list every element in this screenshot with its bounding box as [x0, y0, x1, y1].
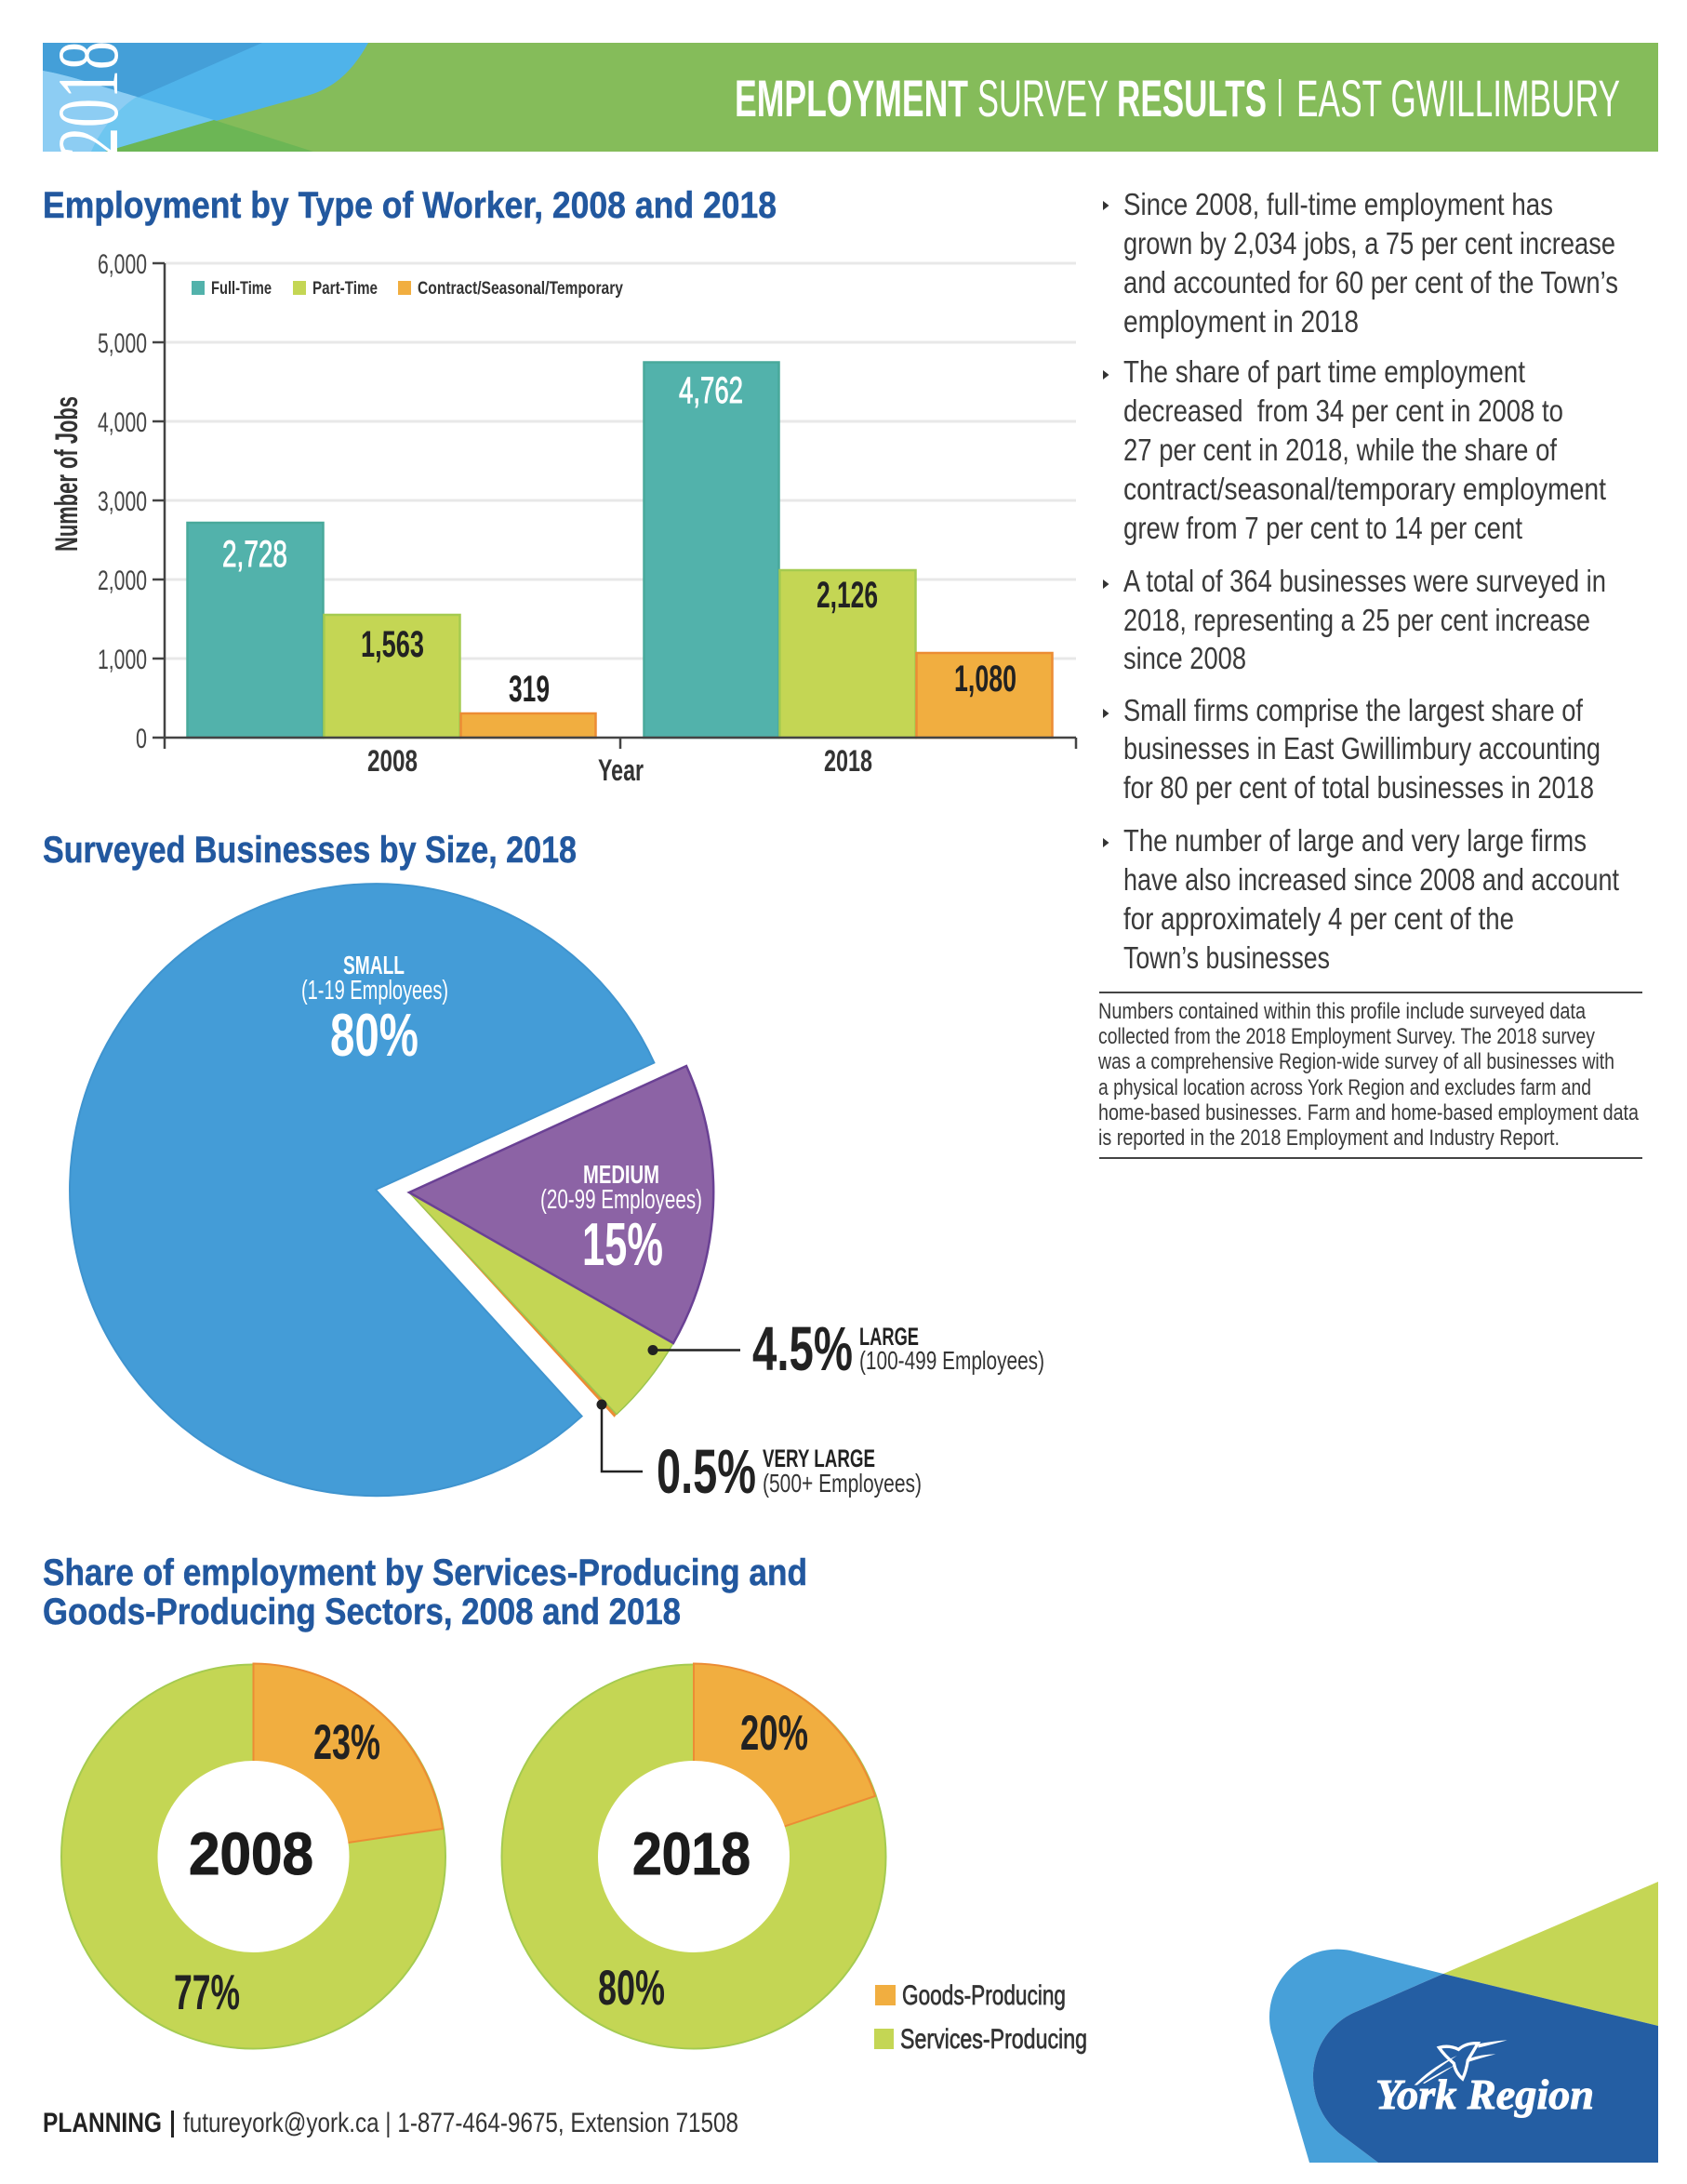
x axis labels: 2018 — [824, 744, 872, 778]
bullet: part-time share: grew from 7 per cent to 14 per cent — [1123, 511, 1522, 545]
label: small: SMALL — [343, 951, 405, 979]
header title: SURVEY — [977, 69, 1109, 127]
x axis labels — [367, 744, 872, 787]
callout: very large: (500+ Employees) — [763, 1469, 922, 1498]
callout: large: LARGE — [859, 1323, 919, 1351]
slice: medium 15% — [409, 1066, 713, 1343]
bar value labels: 319 — [509, 669, 550, 710]
bullet: part-time share: 27 per cent in 2018, while the share of — [1123, 433, 1558, 467]
donut hole — [158, 1761, 350, 1952]
heading: share of employment: Share of employment by Services-Producing and — [43, 1552, 807, 1593]
legend — [192, 279, 623, 299]
slice: small 80% — [70, 884, 654, 1496]
value labels — [174, 1715, 380, 2020]
donut legend: Goods-Producing — [902, 1980, 1066, 2011]
y axis tick labels: 1,000 — [98, 645, 147, 675]
label: medium: MEDIUM — [583, 1160, 659, 1189]
y axis tick labels: 2,000 — [98, 566, 147, 596]
footer contact — [43, 2108, 738, 2138]
label: medium: 15% — [582, 1210, 663, 1278]
bar value labels — [222, 370, 1016, 710]
segment: goods-producing 20% — [694, 1663, 875, 1857]
value labels: 77% — [174, 1965, 240, 2020]
callout: very large — [597, 1399, 922, 1507]
header banner — [41, 41, 1658, 156]
bar value labels: 4,762 — [679, 370, 743, 411]
bullet: large firms: The number of large and very large firms — [1123, 823, 1587, 858]
bullet: small firms: Small firms comprise the largest share of — [1123, 693, 1584, 727]
header title — [735, 69, 1620, 127]
footer contact: PLANNING — [43, 2108, 162, 2138]
value labels: 2008 — [189, 1820, 313, 1887]
callout: large: (100-499 Employees) — [859, 1346, 1044, 1375]
heading: employment by type of worker: Employment by Type of Worker, 2008 and 2018 — [43, 185, 777, 226]
bullet: full-time employment — [1103, 187, 1618, 339]
x axis labels: Year — [598, 753, 644, 787]
callout: large — [647, 1314, 1044, 1384]
callout: very large: 0.5% — [657, 1437, 756, 1507]
bullet: part-time share: The share of part time employment — [1123, 354, 1525, 389]
York Region logo block — [1269, 1882, 1658, 2163]
bullet: part-time share — [1103, 354, 1606, 545]
y axis tick labels: 6,000 — [98, 249, 147, 280]
donut legend: Services-Producing — [900, 2024, 1087, 2055]
label: small: 80% — [330, 1001, 418, 1069]
bars 2018 — [644, 363, 1053, 738]
bullet: businesses surveyed: 2018, representing a 25 per cent increase — [1123, 603, 1590, 637]
heading: surveyed businesses by size: Surveyed Businesses by Size, 2018 — [43, 830, 577, 871]
bar value labels: 1,080 — [954, 659, 1016, 699]
value labels: 20% — [740, 1706, 808, 1761]
y axis title: Number of Jobs — [49, 396, 85, 552]
callout: very large: VERY LARGE — [763, 1445, 875, 1472]
bullet: large firms — [1103, 823, 1619, 975]
bullet: businesses surveyed — [1103, 564, 1606, 675]
x axis labels: 2008 — [367, 744, 418, 778]
callout: large: 4.5% — [752, 1314, 853, 1384]
donut legend — [874, 1980, 1087, 2055]
bullet: businesses surveyed: since 2008 — [1123, 641, 1246, 675]
axes — [153, 263, 1076, 749]
segment: goods-producing 23% — [253, 1663, 443, 1857]
legend: Part-Time — [312, 279, 378, 299]
y axis tick labels: 0 — [136, 724, 147, 754]
legend: Contract/Seasonal/Temporary — [418, 279, 623, 299]
bullet: part-time share: decreased from 34 per cent in 2008 to — [1123, 393, 1563, 428]
header graphic shapes — [41, 41, 368, 156]
label: small: (1-19 Employees) — [301, 976, 448, 1005]
value labels — [598, 1706, 808, 2016]
bullet: full-time employment: employment in 2018 — [1123, 304, 1359, 339]
bar value labels: 1,563 — [361, 624, 424, 665]
donut chart: 2018 — [502, 1663, 885, 2048]
donut hole — [598, 1761, 790, 1952]
y axis tick labels: 3,000 — [98, 486, 147, 517]
icon: York Region star — [1415, 2040, 1508, 2085]
value labels: 2018 — [632, 1820, 751, 1887]
bullet: small firms: businesses in East Gwillimbury accounting — [1123, 731, 1601, 766]
bar value labels: 2,728 — [222, 534, 287, 575]
legend: Full-Time — [211, 279, 272, 299]
footnote — [1097, 992, 1642, 1158]
logo wordmark: York Region — [1375, 2071, 1594, 2118]
donut chart: 2008 — [61, 1663, 445, 2048]
bullet list — [1103, 187, 1619, 975]
slice: very large 0.5% — [409, 1192, 618, 1417]
bar chart: employment by type of worker — [49, 249, 1076, 787]
bullet: small firms: for 80 per cent of total businesses in 2018 — [1123, 770, 1594, 805]
footnote: is reported in the 2018 Employment and Industry Report. — [1098, 1125, 1560, 1151]
slice: large 4.5% — [409, 1192, 673, 1414]
label: medium — [540, 1160, 702, 1278]
bullet: large firms: for approximately 4 per cent of the — [1123, 901, 1514, 936]
bar value labels: 2,126 — [817, 575, 878, 616]
bullet: part-time share: contract/seasonal/temporary employment — [1123, 472, 1606, 506]
heading: share of employment — [43, 1552, 807, 1632]
value labels: 23% — [313, 1715, 380, 1770]
footer contact: futureyork@york.ca | 1-877-464-9675, Extension 71508 — [183, 2108, 738, 2138]
heading: share of employment: Goods-Producing Sectors, 2008 and 2018 — [43, 1591, 681, 1632]
y axis tick labels: 4,000 — [98, 407, 147, 438]
bars 2008 — [188, 523, 595, 738]
footnote: Numbers contained within this profile include surveyed data — [1098, 999, 1587, 1024]
header title: RESULTS — [1117, 69, 1267, 127]
y axis tick labels — [98, 249, 147, 754]
pie chart: businesses by size — [70, 884, 1044, 1507]
bullet: large firms: Town’s businesses — [1123, 940, 1330, 975]
label: small — [301, 951, 448, 1069]
y axis tick labels: 5,000 — [98, 328, 147, 359]
header title: EMPLOYMENT — [735, 69, 968, 127]
bullet: full-time employment: Since 2008, full-time employment has — [1123, 187, 1553, 221]
value labels: 80% — [598, 1961, 665, 2016]
label: medium: (20-99 Employees) — [540, 1185, 702, 1215]
bullet: small firms — [1103, 693, 1601, 805]
